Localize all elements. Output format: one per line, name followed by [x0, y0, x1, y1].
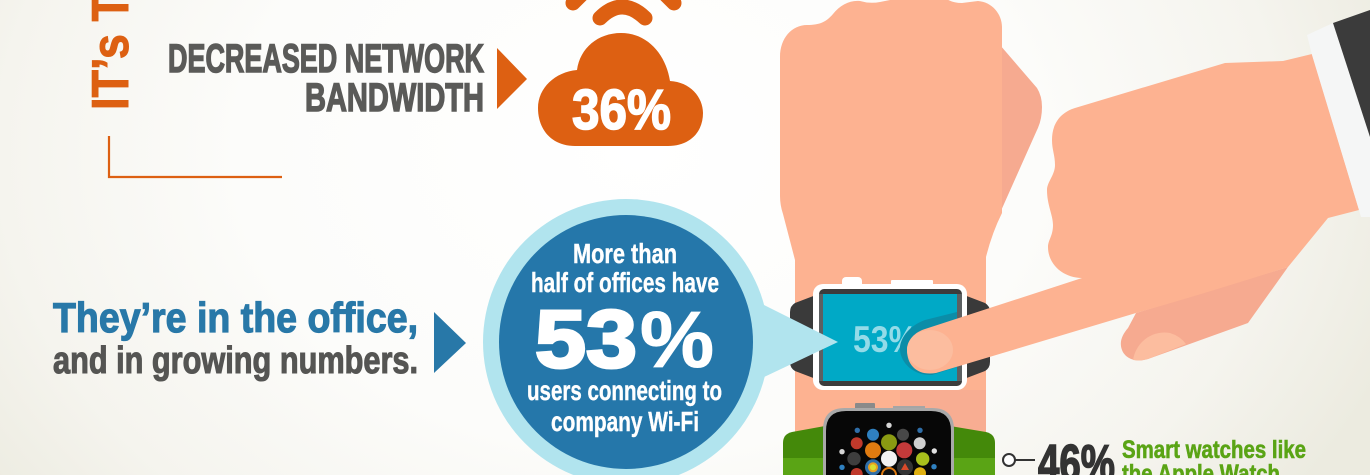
stat label [1122, 436, 1306, 475]
bubble text: users connecting to [527, 375, 722, 406]
watch buttons [842, 277, 862, 289]
connector [1003, 454, 1035, 466]
fingertip highlight [907, 330, 953, 370]
thumb nail [1133, 333, 1186, 360]
arrow: orange [497, 48, 527, 109]
wifi arcs [573, 0, 674, 18]
bubble text: % [640, 295, 714, 384]
app icons [839, 423, 937, 475]
watch lugs [790, 295, 816, 379]
watch: blue screen [790, 277, 990, 390]
heading: they're in the office: and in growing numbers. [53, 340, 418, 382]
thumb [1121, 267, 1288, 360]
arm with fist [780, 0, 1042, 475]
cloud value: 36% [572, 78, 671, 142]
watch case [823, 408, 954, 475]
forearm and fist [780, 0, 1002, 475]
stat: 46% smart watches [1003, 435, 1306, 475]
watch face [826, 411, 951, 475]
bubble outer ring [483, 199, 769, 475]
bubble text: company Wi-Fi [551, 406, 699, 437]
finger shadow [900, 312, 957, 375]
bubble inner circle [499, 215, 753, 469]
heading: they're in the office: They’re in the office, [53, 294, 418, 341]
wrist shade [900, 390, 986, 435]
cuff [1307, 23, 1370, 217]
screen value: 53% [853, 319, 917, 360]
smart watch: green band [783, 403, 995, 475]
watch case [813, 284, 967, 390]
band upper [783, 426, 995, 475]
crown [855, 403, 875, 409]
cloud [538, 33, 703, 146]
corner bracket line [109, 136, 282, 177]
hand and finger [907, 54, 1359, 374]
text: decreased network bandwidth [168, 37, 484, 120]
arrow: blue [434, 312, 466, 373]
text: decreased network bandwidth: DECREASED NETWORK [168, 37, 484, 81]
bubble text: 53 [535, 294, 637, 385]
icon: wifi cloud 36% [538, 0, 703, 146]
bubble text [527, 238, 722, 437]
stat label: Smart watches like [1122, 436, 1306, 464]
jacket sleeve [1333, 10, 1370, 137]
pointing hand [907, 10, 1370, 374]
bubble pointer [760, 303, 838, 378]
side button [893, 406, 925, 409]
watch screen [823, 294, 957, 381]
fist shaded side [1000, 45, 1042, 213]
callout bubble: 53% [483, 199, 838, 475]
bubble text: half of offices have [531, 267, 719, 298]
heading: they're in the office [53, 294, 418, 382]
bubble text: More than [573, 238, 677, 269]
text: decreased network bandwidth: BANDWIDTH [305, 76, 484, 120]
band lower [783, 458, 995, 475]
